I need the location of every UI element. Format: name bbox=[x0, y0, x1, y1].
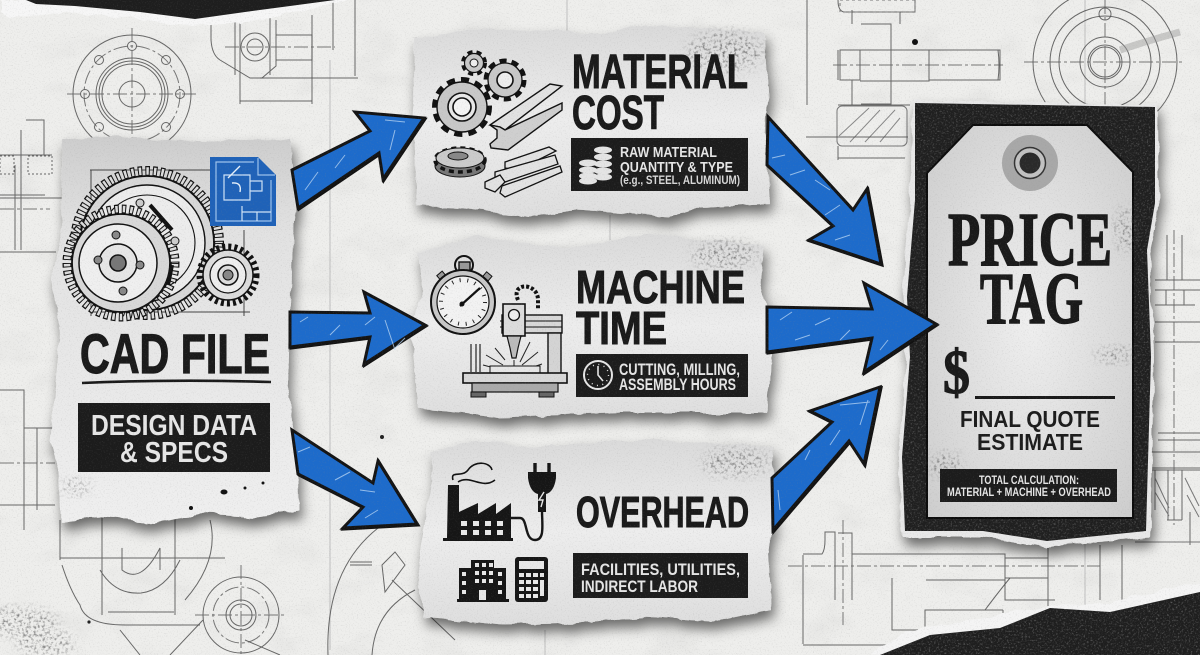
label box: raw material quantity and type: QUANTITY & TYPE bbox=[620, 159, 733, 176]
paper sheet: CAD file bbox=[50, 136, 298, 523]
speckles near bottom bbox=[62, 479, 264, 510]
icon: factory with smoke bbox=[443, 463, 513, 541]
icon: clock bbox=[584, 361, 612, 389]
title underline bbox=[82, 381, 271, 383]
arrow: CAD file to material cost bbox=[292, 112, 424, 208]
panel: material cost bbox=[413, 25, 770, 217]
tag shape bbox=[927, 125, 1133, 518]
blueprint: top-left flange drawing bbox=[67, 28, 199, 153]
blueprint: right-edge bolt drawing bbox=[1150, 230, 1200, 525]
drafting guide lines bbox=[90, 170, 250, 316]
blueprint: bottom-left part drawing bbox=[60, 518, 285, 655]
label box: facilities, utilities, indirect labor: FACILITIES, UTILITIES, bbox=[581, 560, 740, 579]
icon: meshing gears bbox=[67, 171, 256, 317]
torn black paper: top-left bbox=[0, 0, 348, 27]
label box: design data and specs: DESIGN DATA bbox=[91, 410, 257, 442]
label box: design data and specs bbox=[78, 403, 270, 472]
black backing paper bbox=[902, 103, 1155, 541]
smudge: upper right corner bbox=[687, 32, 763, 72]
blueprint: top-right hub and shaft drawing bbox=[806, 0, 1185, 160]
icon: calculator bbox=[515, 557, 548, 602]
tag eyelet bbox=[1002, 135, 1058, 191]
panel: CAD file bbox=[50, 136, 298, 523]
text: final quote estimate: FINAL QUOTE bbox=[960, 406, 1100, 432]
heading: material cost: COST bbox=[572, 87, 664, 140]
torn paper rim bbox=[899, 101, 1159, 547]
icon: stopwatch bbox=[431, 256, 495, 334]
label box: facilities, utilities, indirect labor bbox=[573, 553, 748, 598]
stacked metal bars bbox=[485, 147, 562, 197]
label box: total calculation bbox=[940, 469, 1117, 502]
arrow: overhead to price tag bbox=[772, 387, 880, 530]
torn black paper: bottom-right bbox=[870, 583, 1200, 655]
arrow: CAD file to machine time bbox=[290, 292, 425, 364]
label box: raw material quantity and type bbox=[571, 138, 748, 191]
tag smudges bbox=[929, 208, 1135, 477]
heading: price tag: PRICE bbox=[948, 198, 1112, 282]
label box: cutting, milling, assembly hours: ASSEMBLY HOURS bbox=[619, 375, 736, 394]
text: final quote estimate: ESTIMATE bbox=[977, 429, 1083, 455]
icon: gears, steel beam and bars bbox=[435, 52, 562, 197]
arrow: material cost to price tag bbox=[767, 117, 881, 264]
heading: machine time bbox=[576, 261, 745, 354]
label box: cutting, milling, assembly hours bbox=[576, 354, 748, 397]
smudges: bottom-left speckle bbox=[0, 608, 75, 655]
icon: CNC machine with sparks bbox=[463, 286, 567, 397]
panel: overhead bbox=[418, 439, 773, 625]
label box: facilities, utilities, indirect labor: INDIRECT LABOR bbox=[581, 577, 698, 596]
blueprint: top-centre bracket drawing bbox=[211, 0, 358, 104]
title: CAD FILE: CAD FILE bbox=[80, 322, 270, 385]
icon: coin stacks bbox=[579, 146, 612, 184]
heading: material cost: MATERIAL bbox=[572, 46, 748, 99]
heading: machine time: TIME bbox=[576, 302, 667, 354]
label box: design data and specs: & SPECS bbox=[120, 437, 228, 469]
arrow: CAD file to overhead bbox=[292, 430, 417, 528]
blueprint: left-side assembly drawing bbox=[0, 120, 62, 530]
paper sheet: machine time bbox=[410, 233, 772, 418]
blueprint: bottom-right shaft drawing bbox=[788, 512, 1200, 645]
smudge: upper right corner bbox=[691, 241, 759, 269]
dollar sign and blank line bbox=[943, 339, 1115, 407]
label box: raw material quantity and type: (e.g., STEEL, ALUMINUM) bbox=[620, 173, 740, 187]
icon: office buildings bbox=[457, 560, 509, 602]
label box: cutting, milling, assembly hours: CUTTING, MILLING, bbox=[619, 360, 740, 379]
paper sheet: overhead bbox=[418, 439, 773, 625]
text: final quote estimate bbox=[960, 406, 1100, 455]
smudge: upper right corner bbox=[701, 448, 769, 476]
label box: total calculation: MATERIAL + MACHINE + OVERHEAD bbox=[947, 485, 1111, 499]
paper sheet: material cost bbox=[413, 25, 770, 217]
panel: machine time bbox=[410, 233, 772, 418]
label box: raw material quantity and type: RAW MATERIAL bbox=[620, 144, 717, 161]
heading: price tag: TAG bbox=[980, 258, 1083, 339]
blueprint: bottom-centre arc drawing bbox=[328, 528, 455, 655]
label box: total calculation: TOTAL CALCULATION: bbox=[979, 473, 1079, 487]
arrow: machine time to price tag bbox=[767, 283, 936, 372]
heading: machine time: MACHINE bbox=[576, 261, 745, 313]
panel: price tag bbox=[899, 101, 1159, 547]
heading: price tag bbox=[948, 198, 1112, 339]
heading: overhead: OVERHEAD bbox=[576, 488, 749, 537]
icon: blue CAD document bbox=[210, 157, 276, 226]
dollar sign and blank line: $ bbox=[943, 339, 970, 407]
heading: material cost bbox=[572, 46, 748, 140]
icon: electric plug bbox=[511, 463, 556, 540]
